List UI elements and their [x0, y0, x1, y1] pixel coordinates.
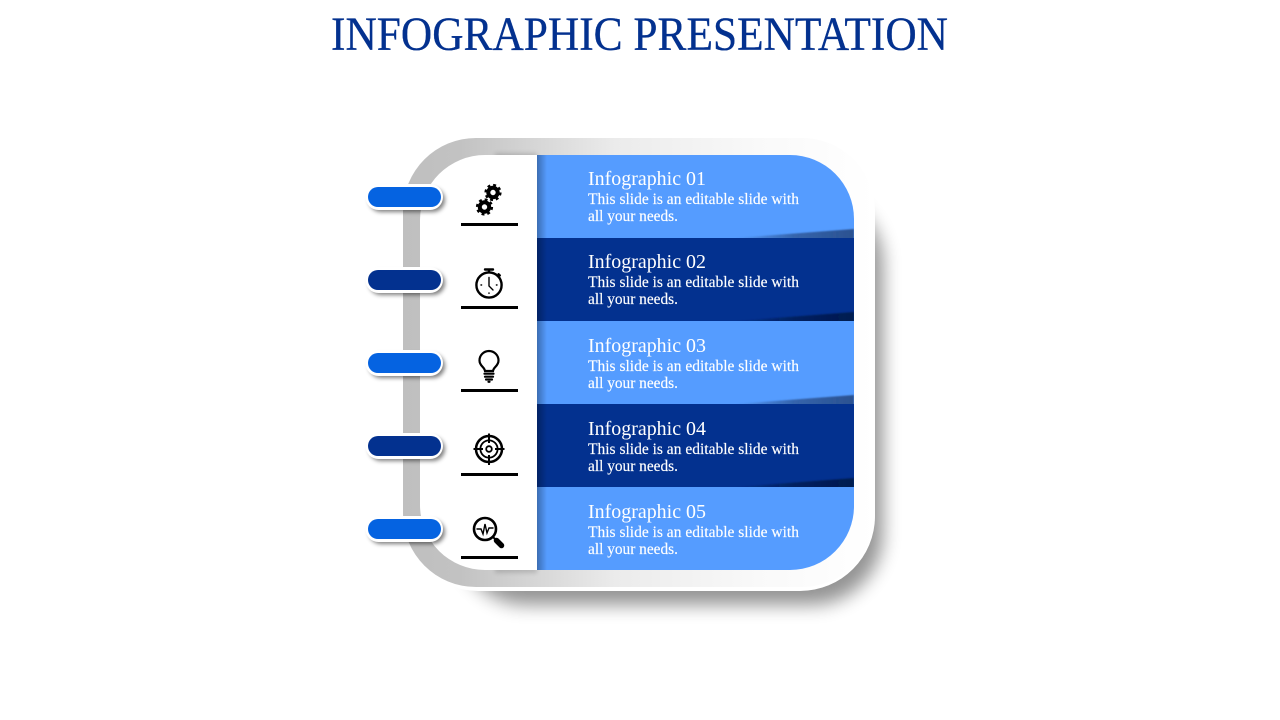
row 1 corner shadow [744, 228, 854, 238]
title: INFOGRAPHIC PRESENTATION [331, 8, 948, 61]
icon: target [474, 434, 504, 465]
panel: notebook frame [403, 138, 883, 605]
row 3 corner shadow [744, 394, 854, 404]
icon: gears [477, 185, 500, 214]
page soft shadow [495, 153, 537, 573]
row 2 corner shadow [748, 312, 854, 321]
text block: row 1 [588, 168, 799, 225]
row 3 background [537, 321, 854, 404]
text block: row 3 [588, 335, 799, 392]
text block: row 4: This slide is an editable slide with [588, 441, 799, 458]
icon line 3 [461, 389, 518, 392]
frame gradient band [403, 138, 875, 587]
text block: row 4 [588, 418, 799, 475]
panel: coloured rows [537, 155, 854, 570]
pill 3 [366, 350, 445, 378]
icon line 2 [461, 306, 518, 309]
row 2 background [537, 238, 854, 321]
text block: row 2: all your needs. [588, 291, 678, 308]
row left edge shadow [537, 155, 547, 570]
row 1 background [537, 155, 854, 238]
text block: row 5: all your needs. [588, 541, 678, 558]
text block: row 3: all your needs. [588, 375, 678, 392]
text block: row 1: Infographic 01 [588, 168, 706, 190]
pill 1 [366, 184, 445, 212]
text block: row 4: Infographic 04 [588, 418, 706, 440]
text block: row 3: This slide is an editable slide with [588, 358, 799, 375]
row 4 background [537, 404, 854, 487]
icon: magnifier with pulse [474, 518, 502, 546]
inner white page [420, 155, 537, 570]
row 4 corner shadow [748, 478, 854, 487]
text block: row 1: all your needs. [588, 208, 678, 225]
row 5 background [537, 487, 854, 570]
text block: row 5: This slide is an editable slide with [588, 524, 799, 541]
pill 4 [366, 433, 445, 461]
pill 2 [366, 267, 445, 295]
text block: row 3: Infographic 03 [588, 335, 706, 357]
text block: row 5: Infographic 05 [588, 501, 706, 523]
text block: row 2 [588, 251, 799, 308]
text block: row 4: all your needs. [588, 458, 678, 475]
text block: row 2: Infographic 02 [588, 251, 706, 273]
text block: row 2: This slide is an editable slide with [588, 274, 799, 291]
text block: row 5 [588, 501, 799, 558]
icon line 4 [461, 473, 518, 476]
icon line 5 [461, 556, 518, 559]
icon: stopwatch [476, 270, 502, 298]
pill 5 [366, 516, 445, 544]
icon: light bulb [480, 351, 498, 382]
text block: row 1: This slide is an editable slide with [588, 191, 799, 208]
frame white rim [403, 138, 875, 591]
frame drop shadow [455, 192, 883, 605]
icon line 1 [461, 223, 518, 226]
